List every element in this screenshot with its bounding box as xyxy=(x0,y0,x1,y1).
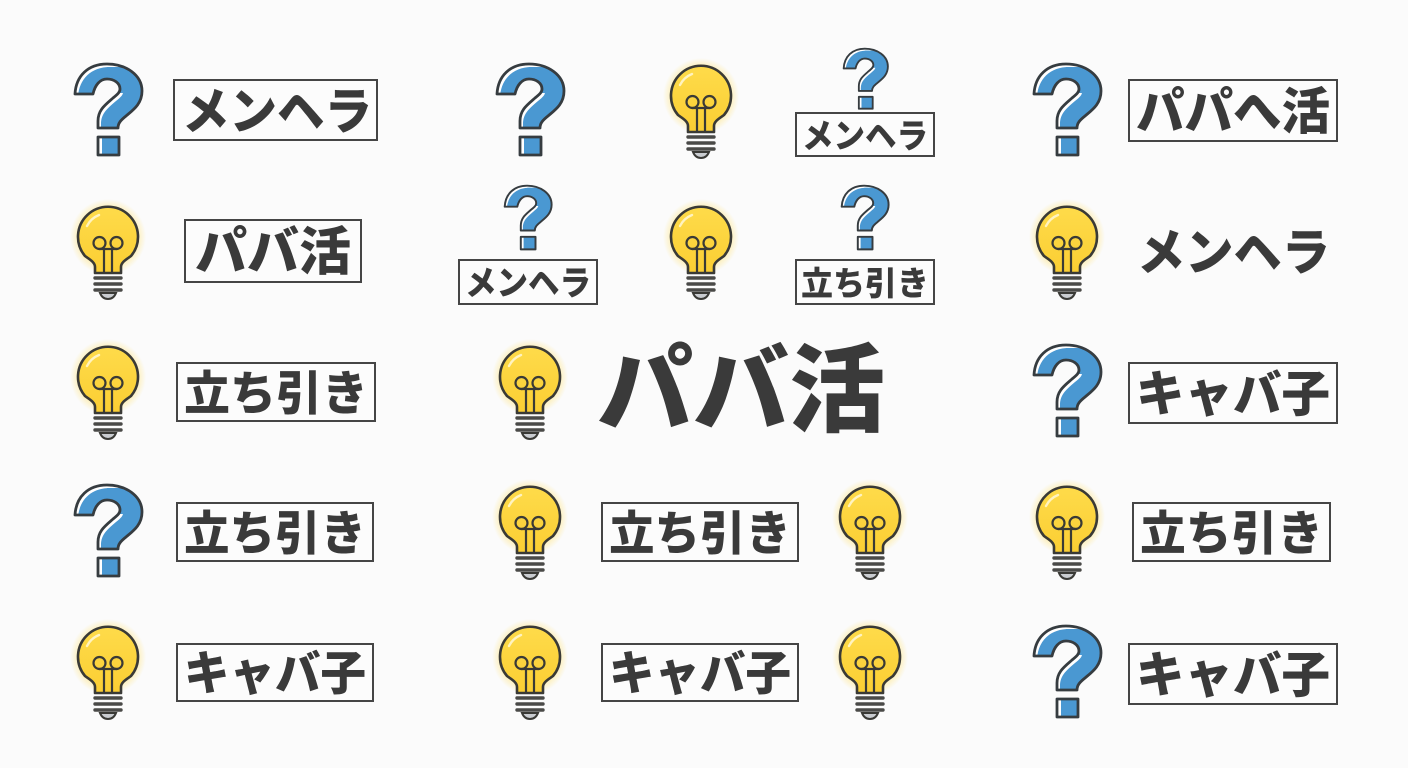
label: メンヘラ small, row 1 centre right: メンヘラ xyxy=(802,118,928,156)
label: キャバ子, row 5 right: キャバ子 xyxy=(1136,649,1330,703)
bulb icon, row 4 centre left xyxy=(492,479,568,579)
bulb icon, row 5 centre right xyxy=(832,619,908,719)
question icon, row 1 centre xyxy=(497,64,567,155)
label: キャバ子, row 3 right: キャバ子 xyxy=(1136,368,1330,422)
headline: パバ活: パバ活 xyxy=(597,338,885,445)
bulb icon, row 3 left xyxy=(70,339,146,439)
question icon, row 4 left xyxy=(75,485,145,576)
label: 立ち引き, row 4 right: 立ち引き xyxy=(1140,507,1323,560)
question icon, row 3 right xyxy=(1034,345,1104,436)
question icon, row 1 right xyxy=(1034,64,1104,155)
bulb icon, row 2 right xyxy=(1029,199,1105,299)
label: 立ち引き, row 4 left: 立ち引き xyxy=(184,507,366,560)
label: キャバ子, row 5 left: キャバ子 xyxy=(184,647,366,700)
bulb icon, row 2 centre xyxy=(663,199,739,299)
bulb icon, row 4 right xyxy=(1029,479,1105,579)
question icon above label, row 2 centre right xyxy=(842,186,891,249)
bulb icon, row 5 centre left xyxy=(492,619,568,719)
bulb icon, row 5 left xyxy=(70,619,146,719)
bulb icon, row 4 centre right xyxy=(832,479,908,579)
bulb icon, row 1 centre xyxy=(663,58,739,158)
label: メンヘラ small, row 2 centre left: メンヘラ xyxy=(465,265,591,303)
bulb icon, row 3 centre xyxy=(492,339,568,439)
label: パパへ活, row 1 right: パパへ活 xyxy=(1136,84,1330,140)
label: 立ち引き, row 4 centre: 立ち引き xyxy=(609,507,791,560)
bulb icon, row 2 left xyxy=(70,199,146,299)
label: メンヘラ, row 1 left: メンヘラ xyxy=(182,84,372,140)
label: キャバ子, row 5 centre: キャバ子 xyxy=(609,647,791,700)
question icon, row 5 right xyxy=(1034,626,1104,717)
question icon above label, row 1 centre right xyxy=(844,49,890,109)
text: メンヘラ without frame, row 2 right: メンヘラ xyxy=(1137,225,1330,281)
label: パバ活, row 2 left: パバ活 xyxy=(195,224,351,282)
question icon, row 1 left xyxy=(75,64,145,155)
label: 立ち引き small, row 2 centre right: 立ち引き xyxy=(801,265,929,302)
question icon above label, row 2 centre left xyxy=(505,186,554,249)
label: 立ち引き, row 3 left: 立ち引き xyxy=(184,367,368,420)
